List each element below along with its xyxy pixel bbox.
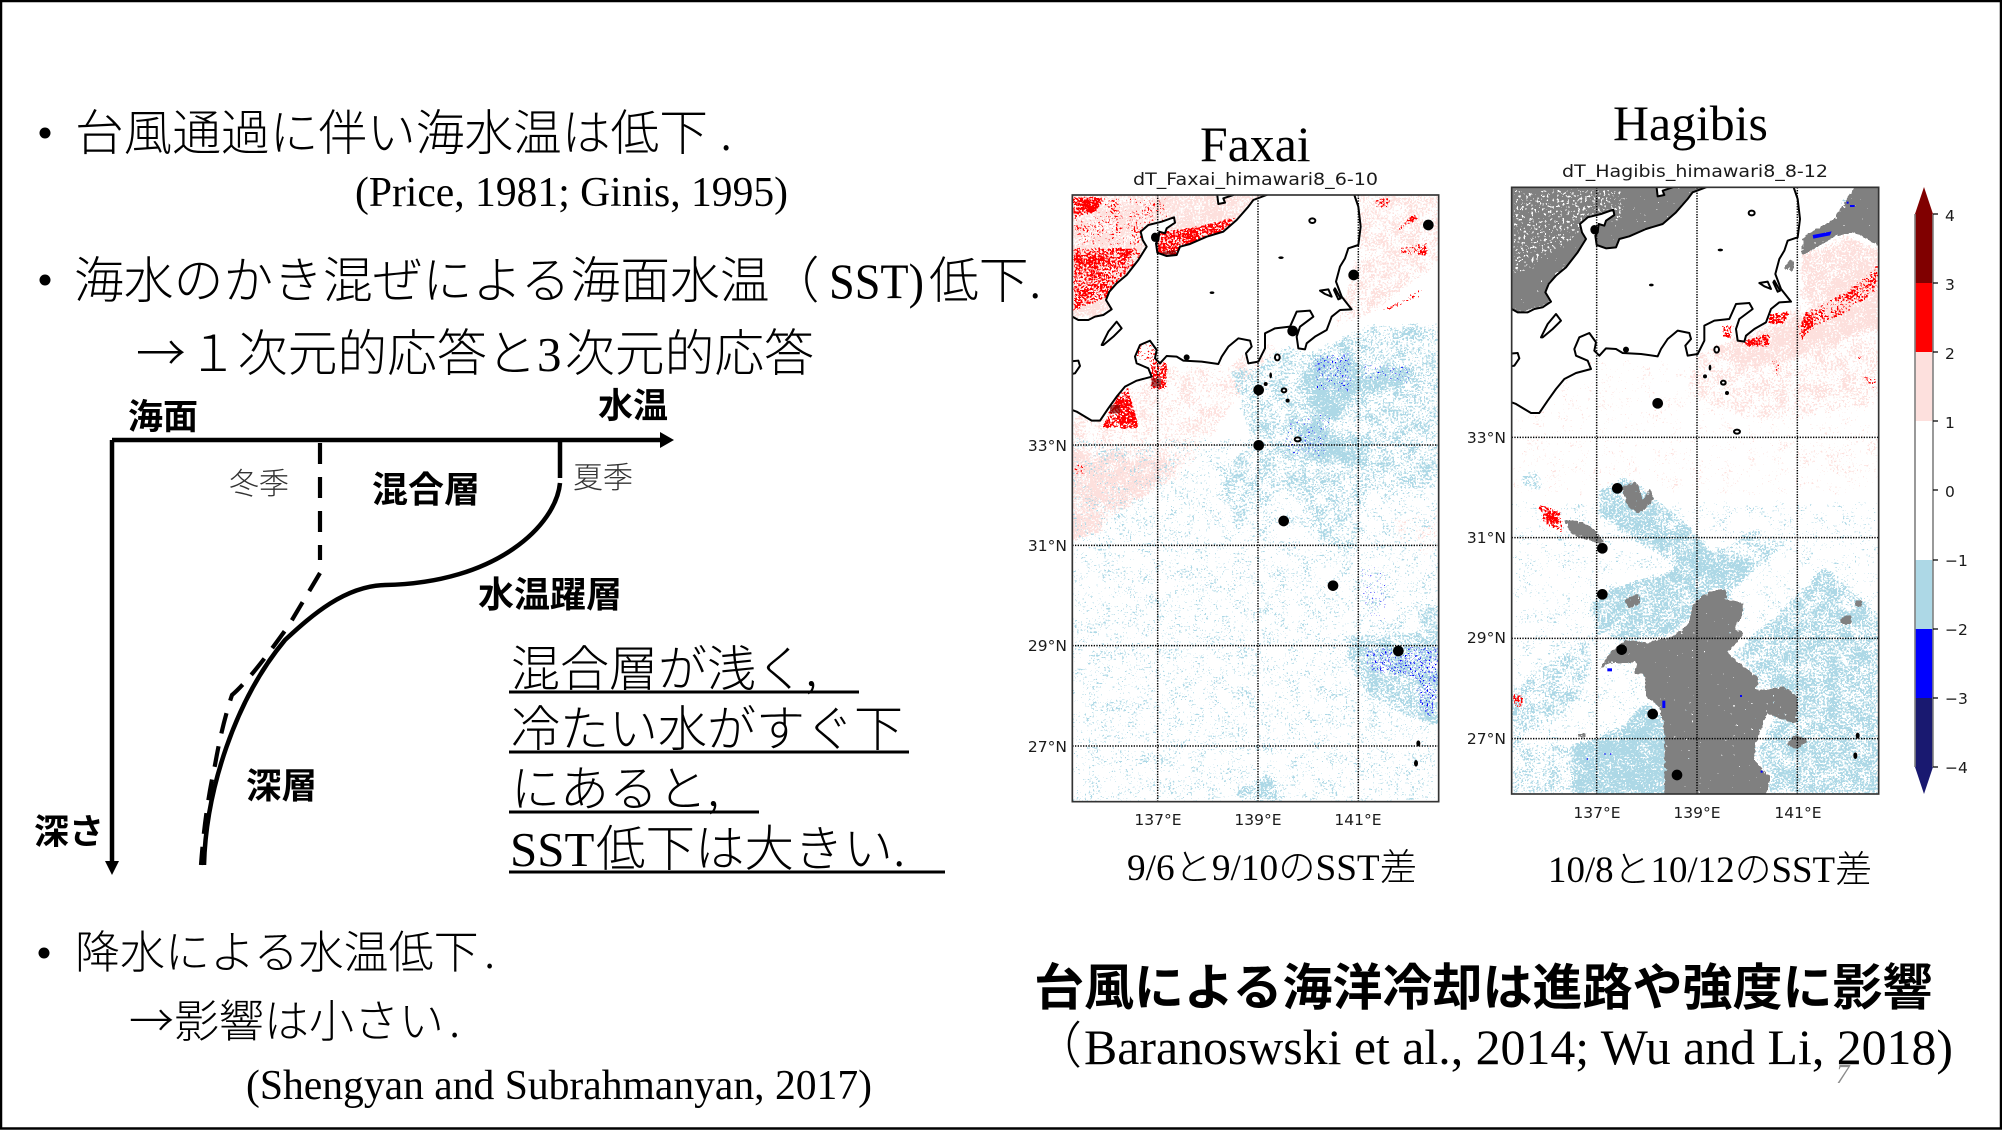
typhoon track dots <box>1253 220 1434 656</box>
callout: shallow mixed layer gives large SST drop: SST <box>510 822 595 877</box>
axis labels: Faxai longitude <box>1134 811 1382 829</box>
citation: Shengyan and Subrahmanyan: (Shengyan and Subrahmanyan, 2017) <box>246 1063 872 1109</box>
colorbar tick labels: −3 <box>1945 690 1968 708</box>
graticule <box>1512 187 1879 794</box>
bullet: rainfall cooling has small influence <box>38 916 872 1109</box>
caption: Hagibis SST difference dates: 10/8と10/12のSST差 <box>1548 850 1872 891</box>
bullet: sea water mixing lowers SST: . <box>1029 241 1041 313</box>
label: summer: 夏季 <box>573 453 633 497</box>
axis labels: Faxai latitude <box>1028 437 1067 756</box>
axis labels: Hagibis longitude <box>1573 804 1822 822</box>
bullet: sea water mixing lowers SST: 海水のかき混ぜによる海面水温（ <box>74 241 819 313</box>
citation: Price and Ginis: (Price, 1981; Ginis, 1995) <box>355 170 788 216</box>
colorbar tick labels: −2 <box>1945 621 1968 639</box>
bullet: rainfall cooling has small influence: . <box>449 985 460 1050</box>
callout: shallow mixed layer gives large SST drop: にあると, <box>511 750 719 821</box>
summer solid profile <box>204 440 560 865</box>
deep blue cooling speckle <box>1280 350 1443 723</box>
saturated red warming patches <box>1512 260 1880 708</box>
colorbar tick labels: 1 <box>1945 414 1955 432</box>
axis labels: Hagibis longitude: 137°E <box>1573 804 1621 822</box>
gray missing-data areas <box>1507 185 1883 797</box>
callout: shallow mixed layer gives large SST drop: 低下は大きい. <box>596 810 905 881</box>
deep blue cooling pixels <box>1587 202 1855 773</box>
axis labels: Faxai latitude: 27°N <box>1028 738 1067 756</box>
label: winter: 冬季 <box>229 459 289 503</box>
typhoon track dots <box>1597 398 1682 780</box>
map title: Faxai himawari: dT_Faxai_himawari8_6-10 <box>1133 170 1378 190</box>
light blue sparse background speckle <box>1067 433 1443 807</box>
light blue cooling patches <box>1507 187 1883 797</box>
label: sea surface: 海面 <box>128 398 198 437</box>
colorbar tick labels: −4 <box>1945 759 1968 777</box>
axis labels: Hagibis latitude <box>1467 429 1506 748</box>
graticule <box>1072 195 1439 802</box>
bullet: typhoon passage lowers sea temperature: 台風通過に伴い海水温は低下 <box>75 95 708 165</box>
label: depth: 深さ <box>34 813 104 852</box>
winter dashed profile <box>201 443 320 865</box>
map: Hagibis SST difference <box>1503 179 1883 797</box>
title: Hagibis: Hagibis <box>1613 96 1768 151</box>
saturated red sparse scatter <box>1072 196 1169 247</box>
light blue sparse background <box>1512 500 1878 760</box>
slide number: 7 <box>1836 1059 1851 1089</box>
label: mixed layer: 混合層 <box>372 469 480 510</box>
map: Faxai SST difference <box>1063 187 1443 807</box>
bullet: typhoon passage lowers sea temperature <box>40 94 788 216</box>
callout: shallow mixed layer gives large SST drop: 混合層が浅く, <box>511 630 817 701</box>
colorbar <box>1915 187 1968 794</box>
axis labels: Faxai longitude: 139°E <box>1234 811 1282 829</box>
axis labels: Faxai latitude: 31°N <box>1028 537 1067 555</box>
land and coastline <box>1063 187 1420 767</box>
pale pink warming speckle <box>1625 234 1878 479</box>
colorbar tick labels: 4 <box>1945 207 1955 225</box>
sub-line: one-dimensional and three-dimensional response: 3 <box>537 327 562 382</box>
white gaps within gray area <box>1512 187 1627 277</box>
label: deep layer: 深層 <box>246 766 317 806</box>
sub-line: one-dimensional and three-dimensional response: → <box>136 314 186 386</box>
axis labels: Faxai longitude: 141°E <box>1334 811 1382 829</box>
axes <box>112 440 664 862</box>
pale pink warming speckle <box>1067 190 1443 567</box>
callout: shallow mixed layer gives large SST drop: 冷たい水がすぐ下 <box>511 690 903 761</box>
arrowheads <box>105 432 674 875</box>
axis labels: Hagibis longitude: 141°E <box>1774 804 1822 822</box>
bullet: rainfall cooling has small influence: 降水による水温低下 <box>75 916 479 981</box>
bullet: rainfall cooling has small influence: . <box>484 916 495 981</box>
pale pink sparse background <box>1514 361 1874 496</box>
bullet: sea water mixing lowers SST: SST) <box>829 253 924 309</box>
sub-line: small influence: →影響は小さい <box>129 985 444 1050</box>
colorbar tick labels: 0 <box>1945 483 1955 501</box>
colorbar tick labels: 2 <box>1945 345 1955 363</box>
bullet: typhoon passage lowers sea temperature: . <box>720 94 732 165</box>
colorbar tick labels: 3 <box>1945 276 1955 294</box>
axis labels: Hagibis latitude: 31°N <box>1467 529 1506 547</box>
axis labels: Hagibis latitude: 27°N <box>1467 730 1506 748</box>
light blue cooling patches <box>1220 323 1438 801</box>
colorbar tick labels <box>1945 207 1968 777</box>
axis labels: Faxai latitude: 33°N <box>1028 437 1067 455</box>
bullet: sea water mixing lowers SST: 低下 <box>929 241 1029 313</box>
conclusion: ocean cooling affects track and intensity: 台風による海洋冷却は進路や強度に影響 <box>1034 960 1932 1016</box>
axis labels: Faxai longitude: 137°E <box>1134 811 1182 829</box>
saturated red warming patches <box>1072 197 1428 477</box>
sub-line: one-dimensional and three-dimensional response: 次元的応答 <box>565 314 814 386</box>
axis labels: Hagibis latitude: 29°N <box>1467 629 1506 647</box>
caption: Faxai SST difference dates: 9/6と9/10のSST差 <box>1127 848 1417 889</box>
citation: Baranoswski, Wu and Li: （ <box>1032 1006 1082 1078</box>
diagram: temperature profile with depth <box>34 387 674 875</box>
label: water temperature: 水温 <box>598 387 668 426</box>
title: Faxai: Faxai <box>1200 117 1311 172</box>
bullet: sea water mixing lowers SST <box>40 241 1041 386</box>
sub-line: one-dimensional and three-dimensional response: １次元的応答と <box>188 314 537 386</box>
axis labels: Hagibis longitude: 139°E <box>1673 804 1721 822</box>
colorbar tick labels: −1 <box>1945 552 1968 570</box>
dark red core pixels <box>1110 250 1177 413</box>
axis labels: Faxai latitude: 29°N <box>1028 637 1067 655</box>
citation: Baranoswski, Wu and Li: Baranoswski et al., 2014; Wu and Li, 2018) <box>1084 1019 1953 1075</box>
sub-line: one-dimensional and three-dimensional response <box>136 314 814 386</box>
map title: Hagibis himawari: dT_Hagibis_himawari8_8-12 <box>1562 162 1828 182</box>
label: thermocline: 水温躍層 <box>478 574 622 615</box>
callout: shallow mixed layer gives large SST drop <box>509 630 945 881</box>
land and coastline <box>1503 179 1860 759</box>
axis labels: Hagibis latitude: 33°N <box>1467 429 1506 447</box>
